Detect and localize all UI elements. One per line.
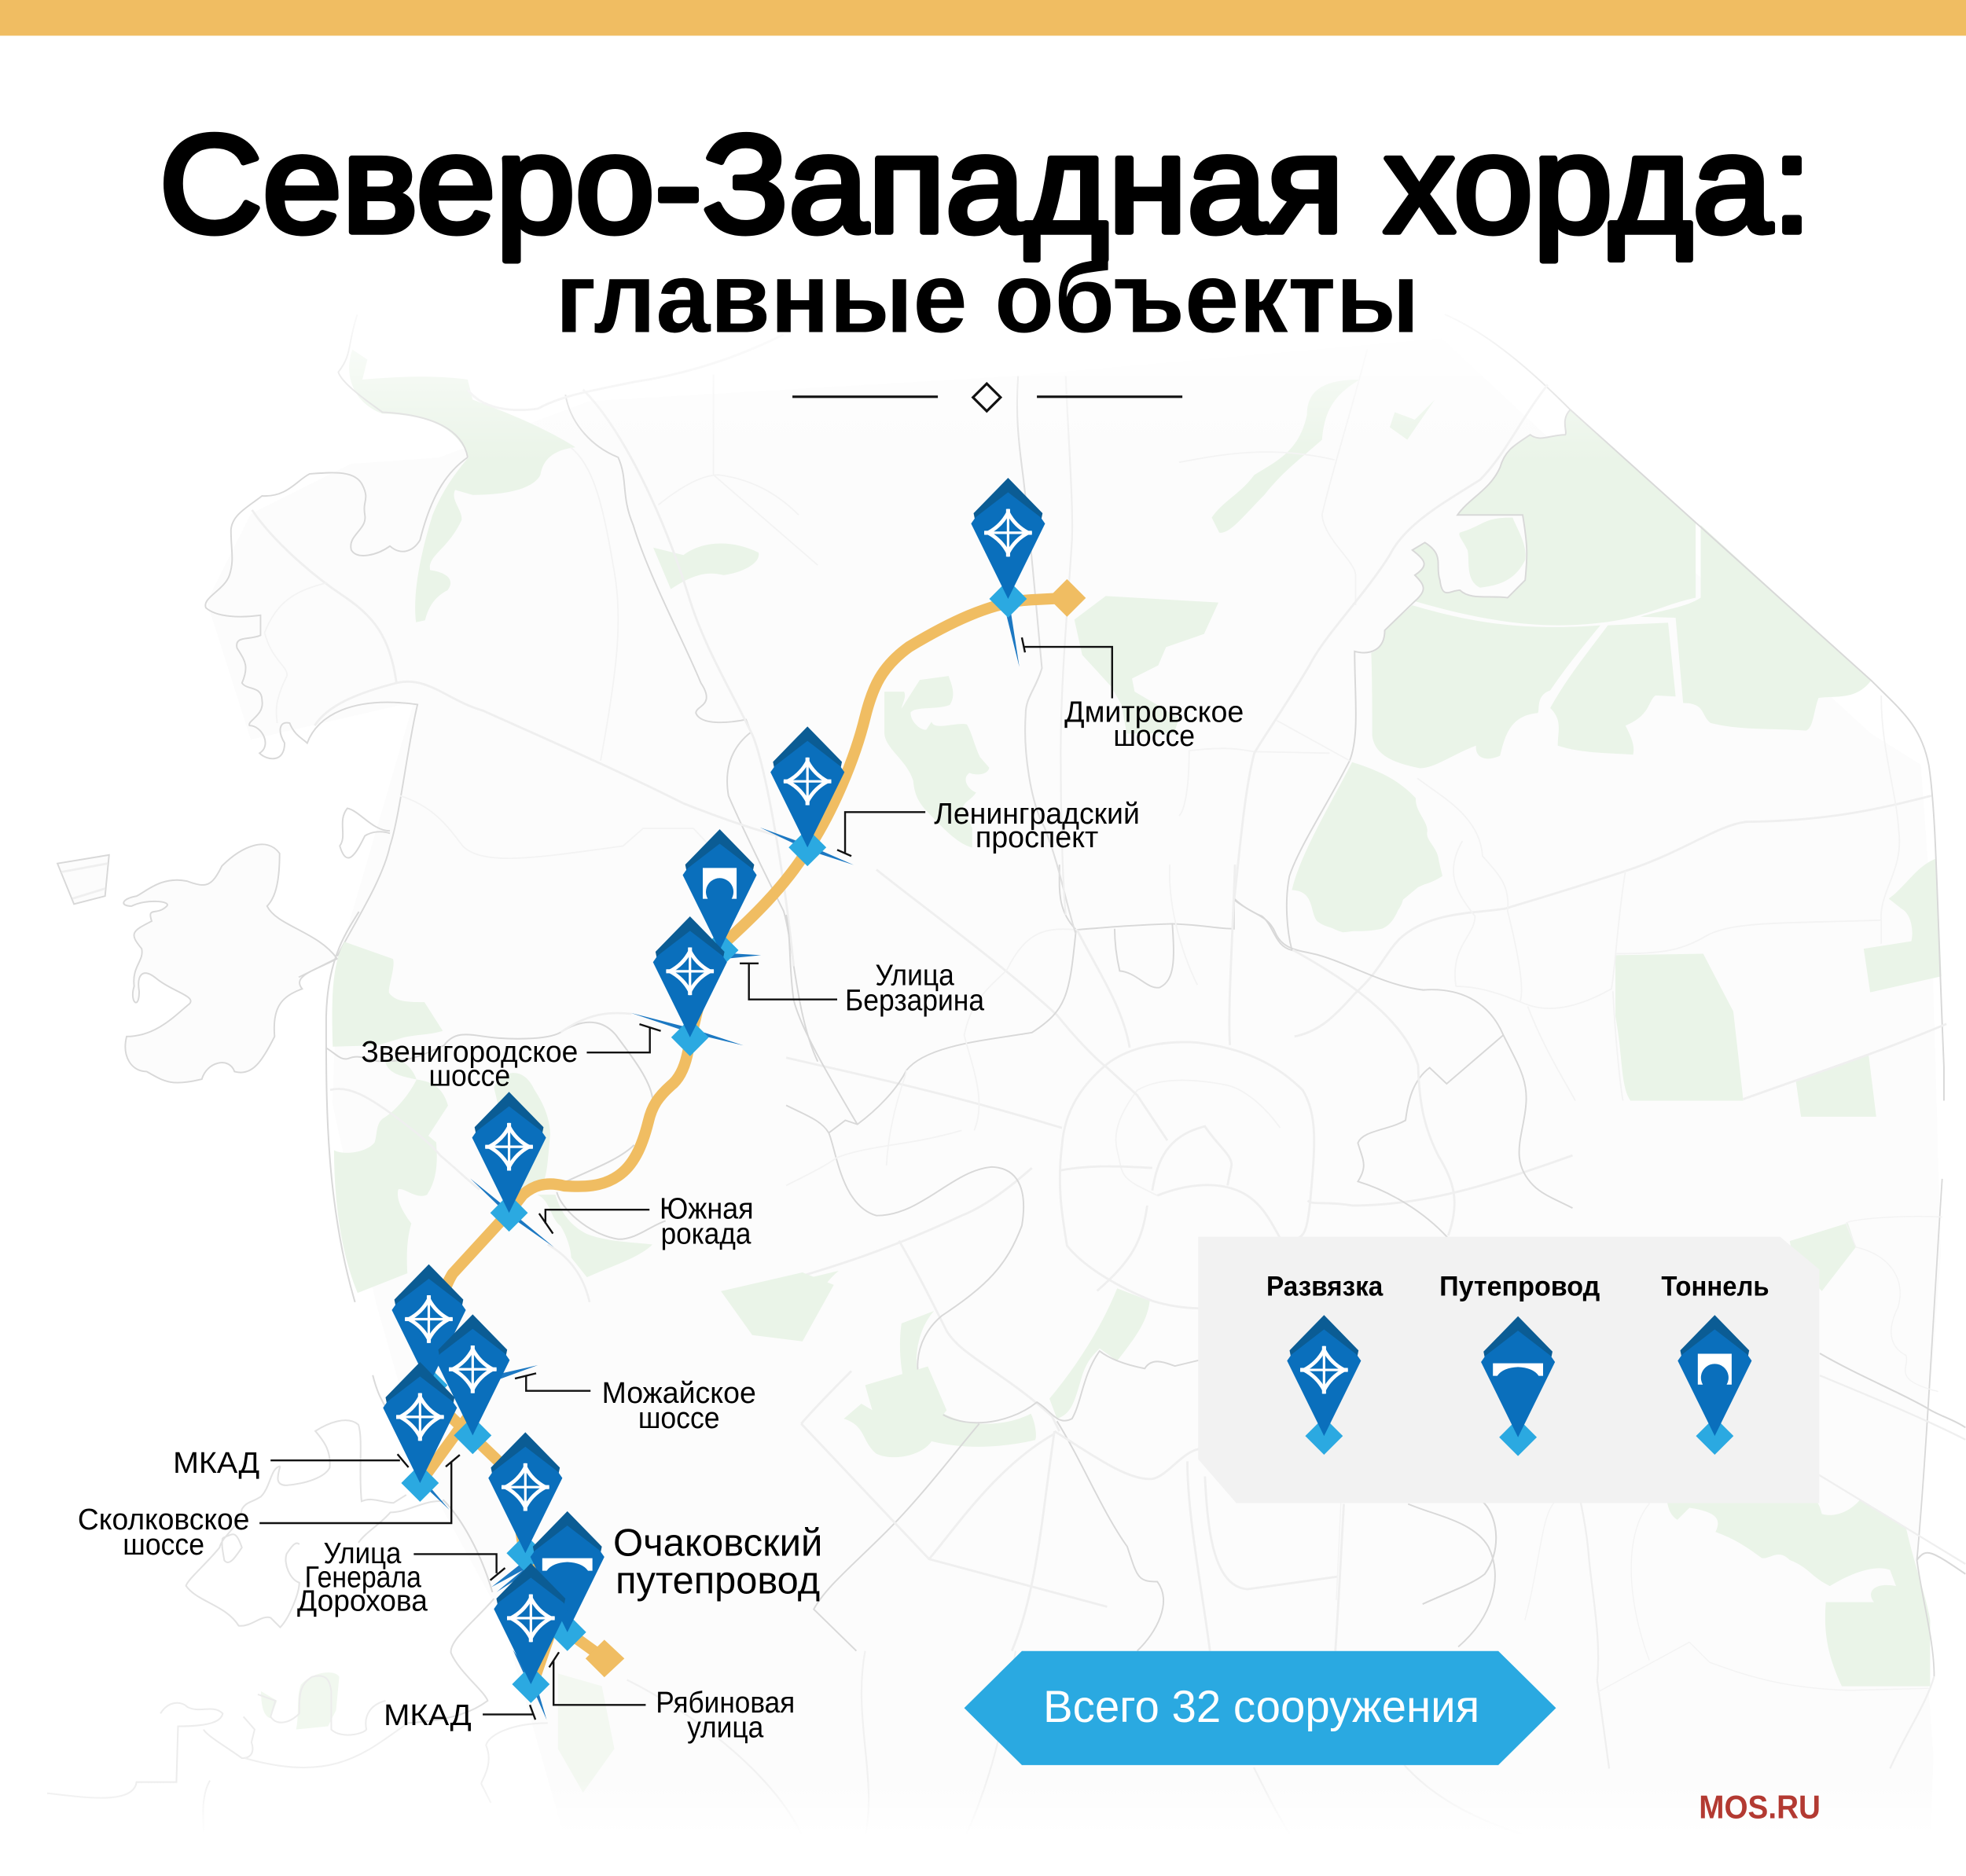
label: Звенигородское шоссе: шоссе — [428, 1059, 510, 1092]
pin: МКАД interchange — [383, 1362, 457, 1502]
label: Можайское шоссе: шоссе — [638, 1401, 720, 1435]
crossing road wedges — [425, 615, 1020, 1720]
label: Ленинградский проспект — [837, 797, 1140, 856]
parks and roads centre, traced at 0.4 scale — [786, 865, 1572, 1651]
legend icon: tunnel — [1678, 1315, 1751, 1455]
label: Можайское шоссе — [515, 1373, 756, 1435]
label: Ленинградский проспект: проспект — [976, 821, 1098, 854]
label: Улица Берзарина — [740, 959, 985, 1018]
legend icon: interchange — [1287, 1315, 1361, 1455]
legend heading: Тоннель: Тоннель — [1661, 1271, 1769, 1301]
label: Улица Генерала Дорохова: Генерала — [305, 1560, 422, 1594]
top accent band — [0, 0, 1966, 35]
parks and roads south-east, traced at 0.32 scale — [1336, 1179, 1965, 1768]
parks and roads west of the chord, traced at 0.209 scale — [299, 912, 666, 1302]
pin: Дмитровское шоссе interchange — [971, 478, 1045, 618]
label: Улица Генерала Дорохова: Дорохова — [297, 1584, 428, 1618]
label: Дмитровское шоссе: Дмитровское — [1064, 696, 1244, 729]
label: Звенигородское шоссе — [361, 1024, 661, 1092]
label: Сколковское шоссе — [78, 1455, 460, 1562]
label: Сколковское шоссе: шоссе — [123, 1528, 204, 1562]
pin: Ленинградский проспект interchange — [770, 726, 844, 866]
label: Очаковский путепровод: Очаковский — [613, 1521, 822, 1564]
pin: улица Генерала Дорохова interchange — [488, 1432, 562, 1572]
label: Улица Генерала Дорохова — [297, 1536, 505, 1618]
label: МКАД south — [384, 1698, 535, 1732]
pin: Можайское шоссе interchange — [435, 1314, 509, 1454]
label: Дмитровское шоссе — [1022, 637, 1244, 753]
label: Южная рокада: Южная — [660, 1191, 754, 1225]
legend icon: overpass — [1481, 1316, 1555, 1456]
parks and roads near Khimki, traced at 0.209 scale — [884, 676, 989, 847]
parks and roads west, traced at 0.4 scale — [57, 314, 818, 1083]
pin: Южная рокада interchange — [472, 1092, 546, 1232]
label: МКАД west: МКАД — [173, 1446, 259, 1480]
label: Очаковский путепровод — [613, 1521, 822, 1602]
route of the North-West Chord — [420, 579, 1086, 1680]
logo: MOS.RU: MOS.RU — [1699, 1789, 1821, 1826]
label: Рябиновая улица — [549, 1652, 795, 1745]
divider with diamond — [792, 384, 1182, 411]
label: Очаковский путепровод: путепровод — [616, 1558, 820, 1602]
label: МКАД west — [173, 1446, 409, 1480]
label: Дмитровское шоссе: шоссе — [1113, 719, 1195, 753]
remaining faint streets in page coordinates — [558, 376, 1530, 1837]
pin: Можайское шоссе upper interchange — [391, 1265, 466, 1404]
label: Ленинградский проспект: Ленинградский — [934, 797, 1140, 831]
label: Улица Генерала Дорохова: Улица — [324, 1536, 402, 1570]
label: Рябиновая улица: Рябиновая — [656, 1686, 795, 1720]
pin: улица Берзарина tunnel — [682, 829, 757, 969]
subtitle: главные объекты — [556, 242, 1420, 354]
south-western outskirts, traced at 0.2546 scale — [47, 1375, 548, 1831]
pin: южная МКАД interchange — [494, 1563, 568, 1703]
label: Улица Берзарина: Берзарина — [845, 984, 985, 1018]
title: Северо-Западная хорда: — [160, 106, 1812, 262]
label: Южная рокада: рокада — [661, 1217, 751, 1250]
pin: Очаковский путепровод overpass — [531, 1511, 604, 1651]
legend heading: Путепровод: Путепровод — [1439, 1271, 1600, 1301]
label: МКАД south: МКАД — [384, 1698, 472, 1732]
label: Рябиновая улица: улица — [687, 1711, 764, 1745]
route start diamond — [1048, 579, 1086, 617]
route end diamond — [586, 1639, 624, 1677]
label: Улица Берзарина: Улица — [875, 959, 954, 993]
callout: total structures: Всего 32 сооружения — [1043, 1682, 1479, 1732]
legend heading: Развязка: Развязка — [1266, 1271, 1384, 1301]
parks and roads north-east, traced at 0.4 scale — [1179, 314, 1946, 1117]
label: Южная рокада — [539, 1191, 754, 1250]
pin: Звенигородское шоссе interchange — [653, 916, 727, 1056]
label: Звенигородское шоссе: Звенигородское — [361, 1035, 578, 1069]
callout: total structures — [965, 1651, 1556, 1765]
park by Dmitrovskoe highway, traced at 0.209 scale — [1075, 596, 1218, 733]
label: Можайское шоссе: Можайское — [602, 1376, 756, 1410]
panel: legend — [1198, 1237, 1819, 1503]
label: Сколковское шоссе: Сколковское — [78, 1503, 249, 1536]
